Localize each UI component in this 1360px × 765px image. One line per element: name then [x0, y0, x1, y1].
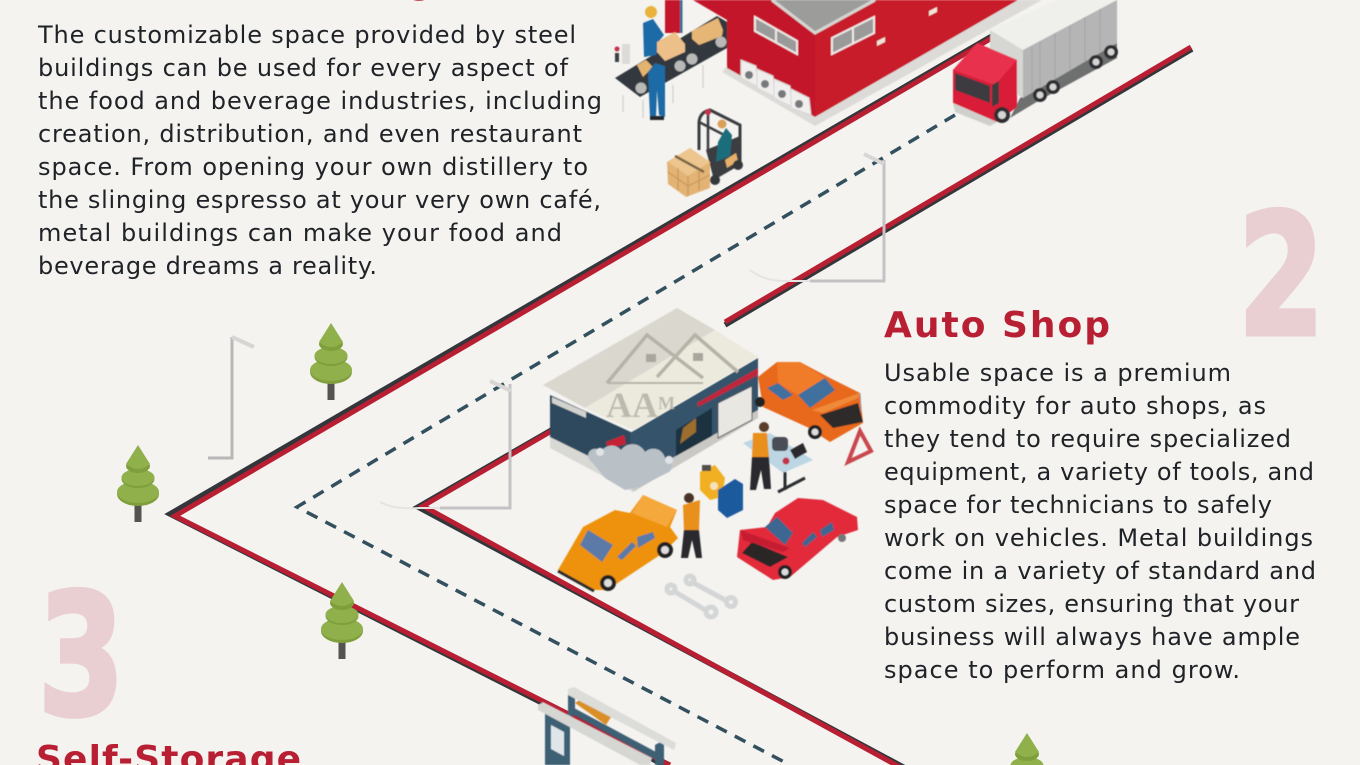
text block: food and beverage: beverage dreams a reality. — [38, 252, 377, 280]
watermark logo — [606, 335, 738, 425]
text block: food and beverage: the food and beverage industries, including — [38, 87, 602, 115]
illustration: self-storage frame — [538, 687, 676, 765]
illustration: auto shop scene — [543, 308, 871, 617]
number 3: 3 — [38, 558, 125, 754]
tree 1 — [310, 323, 352, 400]
text block: food and beverage — [37, 21, 602, 280]
red car — [737, 498, 858, 580]
road: outer edge line — [170, 36, 992, 765]
text block: auto shop: they tend to require specialized — [884, 425, 1291, 453]
warning triangle — [848, 431, 871, 462]
text block: auto shop: come in a variety of standard and — [884, 557, 1316, 585]
text block: food and beverage: creation, distribution, and even restaurant — [38, 120, 582, 148]
oil containers — [700, 465, 743, 518]
text block: auto shop: commodity for auto shops, as — [884, 392, 1266, 420]
road: dashed centre line — [297, 115, 955, 765]
text block: food and beverage: The customizable space provided by steel — [37, 21, 576, 49]
text block: food and beverage: space. From opening your own distillery to — [38, 153, 588, 181]
text block: auto shop: equipment, a variety of tools, and — [884, 458, 1314, 486]
text block: auto shop: work on vehicles. Metal buildings — [884, 524, 1313, 552]
heading: auto shop: Auto Shop — [884, 305, 1110, 346]
warehouse building — [665, 0, 1042, 126]
tree 4 — [1006, 733, 1048, 765]
text block: food and beverage: buildings can be used for every aspect of — [38, 54, 569, 82]
number 2: 2 — [1238, 178, 1325, 374]
text block: auto shop — [884, 359, 1316, 684]
text block: auto shop: space to perform and grow. — [884, 656, 1240, 684]
lamp post 1 — [208, 337, 254, 458]
wrenches — [667, 576, 736, 617]
lamp post 2 — [380, 381, 511, 508]
text block: auto shop: space for technicians to safely — [884, 491, 1272, 519]
text block: food and beverage: the slinging espresso at your very own café, — [38, 186, 601, 214]
text block: food and beverage: metal buildings can make your food and — [38, 219, 562, 247]
conveyor belt with boxes and workers — [614, 6, 727, 120]
auto shop building — [543, 308, 758, 492]
mechanic at yellow car — [681, 493, 702, 558]
road: inner edge line — [418, 47, 1192, 765]
delivery truck — [953, 0, 1118, 126]
yellow car — [558, 495, 678, 591]
text block: auto shop: Usable space is a premium — [884, 359, 1231, 387]
text block: auto shop: custom sizes, ensuring that your — [884, 590, 1299, 618]
orange car with open hood — [755, 362, 863, 442]
tree 2 — [117, 445, 159, 522]
illustration: warehouse with truck and workers — [614, 0, 1118, 197]
watermark logo: M — [658, 393, 675, 413]
watermark logo: AA — [606, 385, 658, 425]
text block: auto shop: business will always have ample — [884, 623, 1300, 651]
mechanic at workbench — [743, 422, 813, 492]
lamp post 3 — [750, 154, 884, 281]
tree 3 — [321, 582, 363, 659]
forklift with pallet — [667, 109, 743, 197]
